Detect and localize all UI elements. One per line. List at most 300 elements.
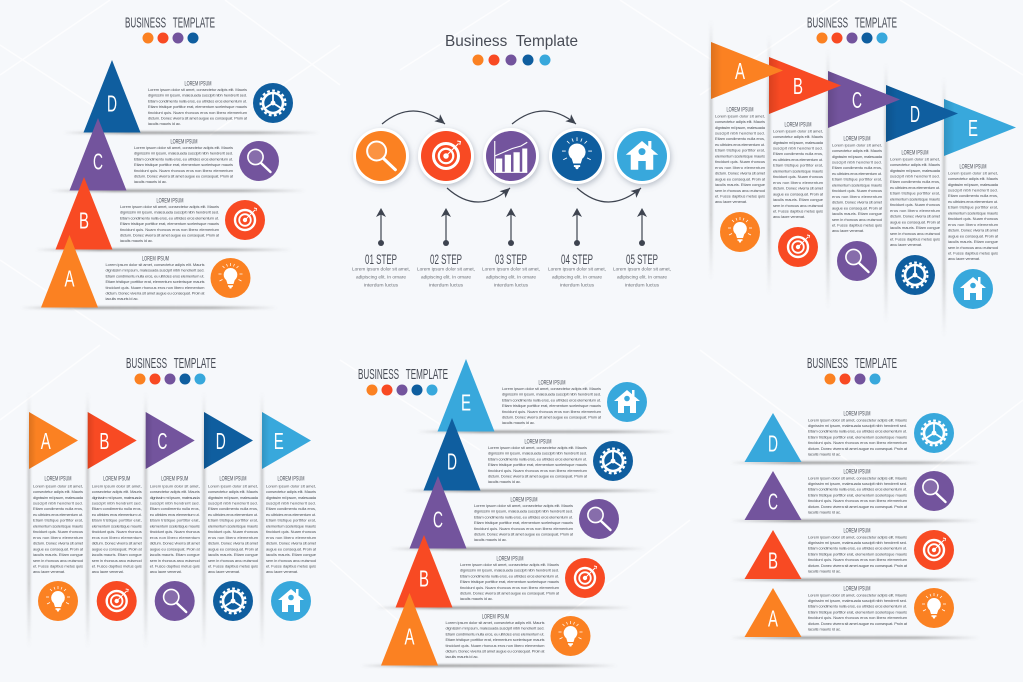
row D: dignissim mi ipsum, malesuada suscipit nibh hendrerit sed.: [148, 93, 247, 98]
column A: augue eu consequat. Proin at: [715, 176, 766, 181]
column B: B: [99, 428, 109, 454]
row C: dictum. Donec viverra sit amet augue eu consequat. Proin at: [474, 532, 574, 536]
row B: Etiam tristique porttitor erat, elementum scelerisque mauris: [808, 551, 907, 556]
column D: [884, 63, 958, 323]
row C: LOREM IPSUM: [844, 468, 870, 476]
column B: augue eu consequat. Proin at: [773, 191, 824, 196]
column A: [710, 20, 783, 280]
row C: iaculis mauris id ac.: [134, 179, 167, 184]
row C: Etiam tristique porttitor erat, elementum scelerisque mauris: [808, 492, 907, 497]
row C: [389, 476, 646, 550]
row B: tincidunt quis. Nuam rhoncus eros non libero elementum: [120, 227, 220, 232]
column E: dictum. Donec viverra sit amet: [948, 228, 999, 233]
step 04 label: Lorem ipsum dolor sit amet,: [548, 266, 606, 272]
column A: Etiam condimentu nulla eros,: [715, 136, 765, 141]
step 02 label: interdum luctus: [429, 282, 464, 288]
column E: [260, 392, 317, 648]
column D: eu ultricies eros elementum ut.: [890, 185, 940, 190]
column E: suscipit nibh hendrerit sed.: [948, 187, 998, 192]
column C: C: [852, 87, 862, 113]
row D: Lorem ipsum dolor sit amet, consectetur adipis elit. Mauris: [808, 417, 907, 422]
column E: eu ultricies eros elementum ut.: [948, 199, 998, 204]
row A: dignissim mi ipsum, malesuada suscipit nibh hendrerit sed.: [106, 268, 204, 273]
row C: tincidunt quis. Nuam rhoncus eros non libero elementum: [474, 526, 574, 531]
row B: LOREM IPSUM: [156, 197, 184, 204]
step 04 label: adipiscing elit. In ornare: [552, 274, 603, 280]
column C: dictum. Donec viverra sit amet: [150, 541, 201, 546]
column B: dictum. Donec viverra sit amet: [773, 186, 824, 191]
column A: Etiam tristique porttitor erat,: [715, 148, 765, 153]
step 01 label: adipiscing elit. In ornare: [356, 274, 407, 280]
row A: dictum. Donec viverra sit amet augue eu consequat. Proin at: [106, 290, 205, 296]
column C: [826, 49, 900, 309]
column D: et. Fusce dapibus metus quis: [208, 564, 258, 569]
row B: iaculis mauris id ac.: [808, 569, 841, 574]
title: BUSINESS TEMPLATE: [358, 367, 448, 383]
step circle 2: [418, 128, 474, 184]
column C: eros non libero elementum: [832, 194, 883, 199]
column D: iaculis mauris. Etiam congue: [208, 552, 259, 557]
column D: arcu laore venenat.: [208, 569, 240, 574]
column E: eros non libero elementum: [266, 535, 317, 540]
column C: et. Fusce dapibus metus quis: [150, 564, 200, 569]
column B: et. Fusce dapibus metus quis: [773, 209, 823, 214]
row A: dictum. Donec viverra sit amet augue eu consequat. Proin at: [446, 648, 545, 654]
row A: [360, 593, 618, 667]
column C: iaculis mauris. Etiam congue: [832, 211, 883, 216]
column C: iaculis mauris. Etiam congue: [150, 552, 200, 557]
row C: Etiam condimentu nulla eros, eu ultricies eros elementum ut.: [808, 487, 907, 492]
column A: sem in rhoncus arcu euismod: [715, 188, 765, 193]
column D: dignissim mi ipsum, malesuada: [890, 168, 941, 173]
column E: dictum. Donec viverra sit amet: [266, 541, 317, 546]
column B: augue eu consequat. Proin at: [92, 546, 143, 551]
row D: D: [768, 430, 778, 456]
row E: dignissim mi ipsum, malesuada suscipit nibh hendrerit sed.: [502, 392, 601, 397]
column A: iaculis mauris. Etiam congue: [715, 182, 766, 187]
column B: tincidunt quis. Nuam rhoncus: [773, 174, 823, 179]
step 03 label: Lorem ipsum dolor sit amet,: [482, 266, 540, 272]
step 03 label: adipiscing elit. In ornare: [486, 274, 537, 280]
row C: [49, 118, 306, 192]
step 02 label: adipiscing elit. In ornare: [421, 274, 472, 280]
column A: Lorem ipsum dolor sit amet,: [33, 483, 83, 488]
row A: A: [64, 266, 75, 292]
panel: bottom-right aligned rows: [730, 356, 980, 639]
column E: Etiam tristique porttitor erat,: [266, 518, 316, 523]
column D: augue eu consequat. Proin at: [890, 219, 941, 224]
column E: Etiam condimentu nulla eros,: [266, 506, 316, 511]
row D: Etiam condimentu nulla eros, eu ultricies eros elementum ut.: [808, 429, 907, 434]
column D: suscipit nibh hendrerit sed.: [208, 500, 258, 505]
column C: Lorem ipsum dolor sit amet,: [150, 483, 200, 488]
vertical arrows: [376, 208, 647, 246]
step 05 label: 05 STEP: [626, 252, 658, 267]
column C: augue eu consequat. Proin at: [832, 205, 883, 210]
row A: iaculis mauris id ac.: [446, 654, 478, 659]
row B: [730, 528, 980, 581]
column B: Lorem ipsum dolor sit amet,: [92, 483, 142, 488]
column A: dignissim mi ipsum, malesuada: [33, 495, 84, 500]
row D: Etiam tristique porttitor erat, elementum scelerisque mauris: [148, 104, 247, 109]
column C: consectetur adipis elit. Mauris: [150, 489, 200, 494]
row C: Etiam condimentu nulla eros, eu ultricies eros elementum ut.: [134, 156, 233, 161]
column D: elementum scelerisque mauris: [208, 523, 258, 528]
column A: suscipit nibh hendrerit sed.: [33, 500, 83, 505]
column E: consectetur adipis elit. Mauris: [948, 176, 998, 181]
column E: iaculis mauris. Etiam congue: [948, 239, 999, 244]
row D: [403, 418, 660, 492]
row A: LOREM IPSUM: [844, 586, 870, 592]
column D: elementum scelerisque mauris: [890, 196, 940, 201]
column E: sem in rhoncus arcu euismod: [266, 558, 316, 563]
step circle 1: [353, 128, 409, 184]
step 05 label: interdum luctus: [625, 282, 660, 288]
column B: dignissim mi ipsum, malesuada: [773, 140, 824, 145]
step 02 label: 02 STEP: [430, 252, 462, 267]
column D: eros non libero elementum: [890, 208, 941, 213]
column B: suscipit nibh hendrerit sed.: [92, 500, 142, 505]
column A: elementum scelerisque mauris: [33, 523, 83, 528]
column A: A: [41, 428, 51, 454]
column D: augue eu consequat. Proin at: [208, 546, 259, 551]
column D: sem in rhoncus arcu euismod: [208, 558, 258, 563]
row A: dictum. Donec viverra sit amet augue eu consequat. Proin at: [808, 621, 908, 626]
row B: tincidunt quis. Nuam rhoncus eros non libero elementum: [460, 585, 560, 590]
column E: Lorem ipsum dolor sit amet,: [266, 483, 316, 488]
column A: dignissim mi ipsum, malesuada: [715, 125, 766, 130]
step 05 label: [613, 252, 671, 288]
row A: tincidunt quis. Nuam rhoncus eros non libero elementum: [446, 643, 545, 648]
column C: dignissim mi ipsum, malesuada: [832, 154, 883, 159]
column D: [202, 392, 259, 648]
column C: [144, 392, 201, 648]
column E: et. Fusce dapibus metus quis: [266, 564, 316, 569]
row C: Etiam tristique porttitor erat, elementum scelerisque mauris: [134, 162, 233, 167]
row A: A: [404, 624, 415, 650]
row D: [730, 410, 980, 464]
row D: tincidunt quis. Nuam rhoncus eros non libero elementum: [488, 468, 588, 473]
column A: A: [735, 58, 745, 84]
column B: Etiam tristique porttitor erat,: [773, 163, 823, 168]
row C: dignissim mi ipsum, malesuada suscipit nibh hendrerit sed.: [134, 151, 233, 156]
panel: top-left stacked pyramid rows: [20, 16, 320, 309]
row C: dictum. Donec viverra sit amet augue eu consequat. Proin at: [808, 504, 908, 509]
row A: Etiam condimentu nulla eros, eu ultricies eros elementum ut.: [106, 273, 204, 278]
column B: consectetur adipis elit. Mauris: [773, 134, 823, 139]
row A: Lorem ipsum dolor sit amet, consectetur adipis elit. Mauris: [446, 620, 544, 625]
row A: Etiam tristique porttitor erat, elementum scelerisque mauris: [106, 279, 205, 284]
column A: iaculis mauris. Etiam congue: [33, 552, 84, 557]
row B: Etiam tristique porttitor erat, elementum scelerisque mauris: [120, 221, 219, 226]
row B: dignissim mi ipsum, malesuada suscipit nibh hendrerit sed.: [808, 540, 907, 545]
column D: dictum. Donec viverra sit amet: [208, 541, 259, 546]
column D: dignissim mi ipsum, malesuada: [208, 495, 259, 500]
column B: et. Fusce dapibus metus quis: [92, 564, 142, 569]
column E: et. Fusce dapibus metus quis: [948, 251, 998, 256]
column C: Etiam condimentu nulla eros,: [832, 165, 882, 170]
column C: eu ultricies eros elementum ut.: [832, 171, 882, 176]
column B: tincidunt quis. Nuam rhoncus: [92, 529, 142, 534]
step 05 label: Lorem ipsum dolor sit amet,: [613, 266, 671, 272]
row A: LOREM IPSUM: [142, 255, 169, 262]
step circle 5: [614, 128, 670, 184]
row D: Etiam condimentu nulla eros, eu ultricies eros elementum ut.: [148, 98, 247, 103]
step 03 label: [482, 252, 540, 288]
step 01 label: [352, 252, 410, 288]
column B: iaculis mauris. Etiam congue: [92, 552, 142, 557]
column C: dignissim mi ipsum, malesuada: [150, 495, 200, 500]
column A: Lorem ipsum dolor sit amet,: [715, 113, 765, 118]
step 04 label: interdum luctus: [560, 282, 595, 288]
row D: Lorem ipsum dolor sit amet, consectetur adipis elit. Mauris: [488, 445, 587, 450]
row E: Etiam condimentu nulla eros, eu ultricies eros elementum ut.: [502, 397, 601, 402]
column B: eros non libero elementum: [92, 535, 142, 540]
row B: dictum. Donec viverra sit amet augue eu consequat. Proin at: [808, 563, 908, 568]
colour dots: [366, 384, 438, 396]
row C: Lorem ipsum dolor sit amet, consectetur adipis elit. Mauris: [134, 145, 233, 150]
panel: bottom-centre stacked pyramid rows: [358, 359, 674, 667]
panel: centre five-step process: [352, 33, 671, 288]
column E: Etiam condimentu nulla eros,: [948, 193, 998, 198]
row D: dictum. Donec viverra sit amet augue eu consequat. Proin at: [488, 474, 588, 478]
column D: LOREM IPSUM: [220, 475, 246, 482]
column E: arcu laore venenat.: [266, 569, 298, 574]
row B: iaculis mauris id ac.: [460, 596, 493, 601]
column C: et. Fusce dapibus metus quis: [832, 223, 882, 228]
colour dots: [134, 374, 206, 384]
column D: suscipit nibh hendrerit sed.: [890, 173, 940, 178]
colour dots: [824, 374, 880, 384]
row D: Etiam tristique porttitor erat, elementum scelerisque mauris: [808, 434, 907, 439]
column E: iaculis mauris. Etiam congue: [266, 552, 317, 557]
column D: Etiam tristique porttitor erat,: [890, 191, 940, 196]
column C: augue eu consequat. Proin at: [150, 546, 201, 551]
column E: elementum scelerisque mauris: [948, 210, 998, 215]
column C: tincidunt quis. Nuam rhoncus: [150, 529, 200, 534]
column C: eros non libero elementum: [150, 535, 200, 540]
column D: sem in rhoncus arcu euismod: [890, 231, 940, 236]
row B: Lorem ipsum dolor sit amet, consectetur adipis elit. Mauris: [120, 204, 219, 209]
row B: Etiam condimentu nulla eros, eu ultricies eros elementum ut.: [120, 215, 219, 220]
row E: Lorem ipsum dolor sit amet, consectetur adipis elit. Mauris: [502, 386, 601, 391]
row D: dignissim mi ipsum, malesuada suscipit nibh hendrerit sed.: [488, 451, 587, 456]
column A: eros non libero elementum: [33, 535, 84, 540]
title: BUSINESS TEMPLATE: [807, 356, 897, 372]
step circle 4: [549, 128, 605, 184]
column A: arcu laore venenat.: [715, 199, 747, 204]
column B: suscipit nibh hendrerit sed.: [773, 145, 823, 150]
column E: Etiam tristique porttitor erat,: [948, 205, 998, 210]
column B: LOREM IPSUM: [103, 475, 130, 482]
row D: LOREM IPSUM: [524, 438, 552, 445]
column C: elementum scelerisque mauris: [150, 523, 200, 528]
column D: tincidunt quis. Nuam rhoncus: [890, 202, 940, 207]
column C: eu ultricies eros elementum ut.: [150, 512, 200, 517]
column C: consectetur adipis elit. Mauris: [832, 148, 882, 153]
column C: arcu laore venenat.: [832, 228, 864, 233]
row C: dictum. Donec viverra sit amet augue eu consequat. Proin at: [134, 174, 234, 178]
row B: tincidunt quis. Nuam rhoncus eros non libero elementum: [808, 557, 908, 562]
column C: tincidunt quis. Nuam rhoncus: [832, 188, 882, 193]
column E: Lorem ipsum dolor sit amet,: [948, 170, 998, 175]
column A: sem in rhoncus arcu euismod: [33, 558, 83, 563]
step 01 label: Lorem ipsum dolor sit amet,: [352, 266, 410, 272]
row D: tincidunt quis. Nuam rhoncus eros non libero elementum: [148, 110, 248, 115]
row B: B: [768, 548, 778, 574]
title: BUSINESS TEMPLATE: [125, 16, 215, 32]
row C: Etiam tristique porttitor erat, elementum scelerisque mauris: [474, 520, 573, 525]
column D: Etiam condimentu nulla eros,: [208, 506, 258, 511]
column D: dictum. Donec viverra sit amet: [890, 214, 941, 219]
column A: tincidunt quis. Nuam rhoncus: [33, 529, 83, 534]
step 01 label: interdum luctus: [364, 282, 399, 288]
column C: dictum. Donec viverra sit amet: [832, 200, 883, 205]
title: Business Template: [445, 33, 578, 50]
row C: dignissim mi ipsum, malesuada suscipit nibh hendrerit sed.: [474, 509, 573, 514]
column A: tincidunt quis. Nuam rhoncus: [715, 159, 765, 164]
column E: augue eu consequat. Proin at: [948, 233, 999, 238]
column D: tincidunt quis. Nuam rhoncus: [208, 529, 258, 534]
row D: D: [447, 448, 457, 474]
column A: eu ultricies eros elementum ut.: [33, 512, 83, 517]
row A: A: [768, 606, 778, 632]
row B: B: [79, 208, 89, 234]
column B: [768, 35, 841, 295]
column B: eu ultricies eros elementum ut.: [773, 157, 823, 162]
row D: Etiam condimentu nulla eros, eu ultricies eros elementum ut.: [488, 456, 587, 461]
row C: C: [433, 506, 443, 532]
column E: eu ultricies eros elementum ut.: [266, 512, 316, 517]
row A: Etiam tristique porttitor erat, elementum scelerisque mauris: [446, 637, 545, 642]
column E: augue eu consequat. Proin at: [266, 546, 317, 551]
step 03 label: interdum luctus: [494, 282, 529, 288]
column D: LOREM IPSUM: [902, 149, 928, 156]
step 04 label: 04 STEP: [561, 252, 593, 267]
row A: Etiam condimentu nulla eros, eu ultricies eros elementum ut.: [808, 604, 907, 609]
row C: LOREM IPSUM: [510, 496, 538, 503]
title: BUSINESS TEMPLATE: [126, 356, 216, 372]
row D: dignissim mi ipsum, malesuada suscipit nibh hendrerit sed.: [808, 423, 907, 428]
row E: LOREM IPSUM: [538, 379, 566, 386]
row D: iaculis mauris id ac.: [488, 479, 521, 484]
column E: LOREM IPSUM: [278, 475, 304, 482]
row A: dignissim mi ipsum, malesuada suscipit nibh hendrerit sed.: [446, 626, 544, 631]
column A: dictum. Donec viverra sit amet: [33, 541, 84, 546]
column C: sem in rhoncus arcu euismod: [832, 217, 882, 222]
column C: elementum scelerisque mauris: [832, 182, 882, 187]
column C: LOREM IPSUM: [161, 475, 188, 482]
column B: dignissim mi ipsum, malesuada: [92, 495, 142, 500]
row D: dictum. Donec viverra sit amet augue eu consequat. Proin at: [808, 446, 908, 451]
step 02 label: [417, 252, 475, 288]
row A: [20, 235, 278, 309]
column D: Lorem ipsum dolor sit amet,: [890, 156, 940, 161]
row B: Etiam condimentu nulla eros, eu ultricies eros elementum ut.: [808, 546, 907, 551]
column B: [86, 392, 143, 648]
column B: sem in rhoncus arcu euismod: [92, 558, 142, 563]
row C: C: [768, 488, 778, 514]
step 05 label: adipiscing elit. In ornare: [617, 274, 668, 280]
column E: LOREM IPSUM: [960, 163, 986, 170]
row B: [35, 177, 292, 251]
curved arrows: [382, 111, 641, 202]
column A: [28, 392, 84, 648]
column A: et. Fusce dapibus metus quis: [715, 194, 765, 199]
column E: dignissim mi ipsum, malesuada: [948, 182, 999, 187]
column D: iaculis mauris. Etiam congue: [890, 225, 941, 230]
column A: Etiam condimentu nulla eros,: [33, 506, 83, 511]
column B: eu ultricies eros elementum ut.: [92, 512, 142, 517]
column A: LOREM IPSUM: [726, 106, 754, 113]
row D: iaculis mauris id ac.: [148, 121, 181, 126]
column C: Etiam condimentu nulla eros,: [150, 506, 200, 511]
column A: LOREM IPSUM: [44, 475, 72, 482]
column E: consectetur adipis elit. Mauris: [266, 489, 316, 494]
colour dots: [142, 32, 198, 44]
column E: elementum scelerisque mauris: [266, 523, 316, 528]
column D: arcu laore venenat.: [890, 242, 922, 247]
column B: Etiam condimentu nulla eros,: [773, 151, 823, 156]
row D: [63, 60, 320, 134]
column B: iaculis mauris. Etiam congue: [773, 197, 824, 202]
column B: arcu laore venenat.: [92, 569, 124, 574]
row B: dignissim mi ipsum, malesuada suscipit nibh hendrerit sed.: [460, 568, 559, 573]
column A: eu ultricies eros elementum ut.: [715, 142, 765, 147]
column A: suscipit nibh hendrerit sed.: [715, 130, 765, 135]
step 01 label: 01 STEP: [365, 252, 397, 267]
row E: iaculis mauris id ac.: [502, 420, 535, 425]
step 04 label: [548, 252, 606, 288]
row C: dignissim mi ipsum, malesuada suscipit nibh hendrerit sed.: [808, 481, 907, 486]
row A: dignissim mi ipsum, malesuada suscipit nibh hendrerit sed.: [808, 598, 907, 603]
column D: consectetur adipis elit. Mauris: [890, 162, 940, 167]
column E: sem in rhoncus arcu euismod: [948, 245, 998, 250]
column E: E: [274, 428, 284, 454]
column A: elementum scelerisque mauris: [715, 153, 765, 158]
column C: arcu laore venenat.: [150, 569, 182, 574]
row C: [730, 468, 980, 522]
column B: arcu laore venenat.: [773, 214, 805, 219]
row C: LOREM IPSUM: [170, 138, 198, 145]
column B: LOREM IPSUM: [784, 121, 812, 128]
row E: Etiam tristique porttitor erat, elementum scelerisque mauris: [502, 403, 601, 408]
column D: Etiam tristique porttitor erat,: [208, 518, 258, 523]
row A: Lorem ipsum dolor sit amet, consectetur adipis elit. Mauris: [808, 592, 907, 597]
column C: C: [157, 428, 167, 454]
column A: consectetur adipis elit. Mauris: [715, 119, 765, 124]
column B: dictum. Donec viverra sit amet: [92, 541, 143, 546]
column C: Etiam tristique porttitor erat,: [150, 518, 200, 523]
column B: Etiam condimentu nulla eros,: [92, 506, 142, 511]
row A: Etiam condimentu nulla eros, eu ultricies eros elementum ut.: [446, 631, 544, 636]
row B: Etiam condimentu nulla eros, eu ultricies eros elementum ut.: [460, 573, 559, 578]
row D: LOREM IPSUM: [844, 410, 870, 418]
step 03 label: 03 STEP: [495, 252, 527, 267]
row B: Lorem ipsum dolor sit amet, consectetur adipis elit. Mauris: [808, 534, 907, 539]
column E: eros non libero elementum: [948, 222, 999, 227]
row B: B: [419, 566, 429, 592]
column B: B: [793, 73, 803, 99]
row B: Etiam tristique porttitor erat, elementum scelerisque mauris: [460, 579, 559, 584]
row C: C: [93, 148, 103, 174]
panel: top-right staggered arrow columns: [710, 16, 1016, 337]
row B: iaculis mauris id ac.: [120, 238, 153, 243]
column C: Etiam tristique porttitor erat,: [832, 177, 882, 182]
column E: tincidunt quis. Nuam rhoncus: [266, 529, 316, 534]
column D: eros non libero elementum: [208, 535, 259, 540]
row A: [730, 586, 980, 639]
